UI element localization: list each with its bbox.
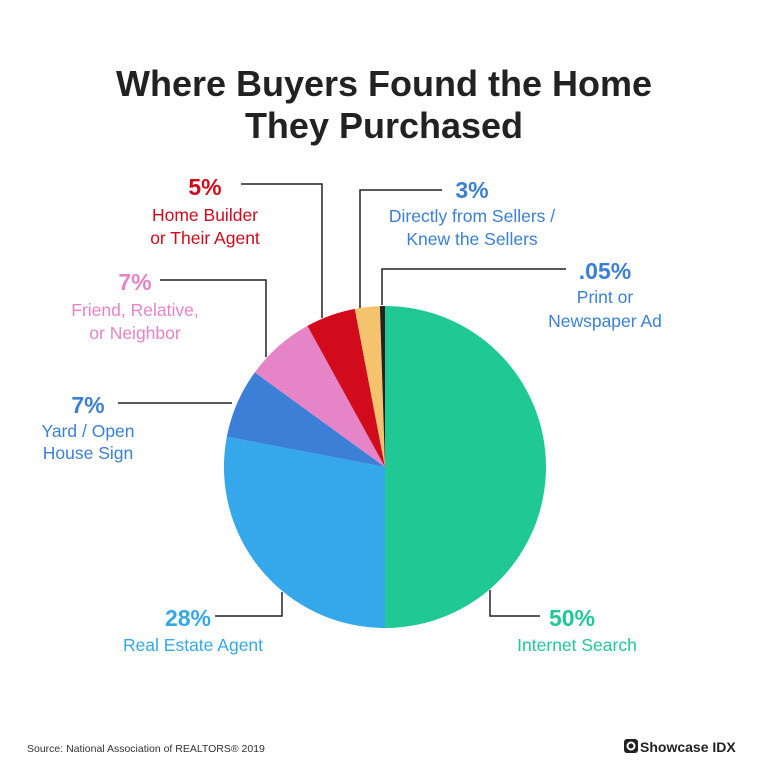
label: sellers xyxy=(389,177,555,249)
label: print: .05% xyxy=(579,258,631,284)
label: sellers: 3% xyxy=(455,177,489,203)
title: They Purchased xyxy=(245,105,523,146)
label: internet search xyxy=(517,605,637,655)
label: real estate agent: Real Estate Agent xyxy=(123,635,263,655)
label: home builder: 5% xyxy=(188,174,222,200)
label: yard sign: Yard / Open xyxy=(41,421,135,441)
label: friend: or Neighbor xyxy=(89,323,181,343)
label: sellers: Knew the Sellers xyxy=(406,229,538,249)
label: internet search: Internet Search xyxy=(517,635,637,655)
label: home builder: or Their Agent xyxy=(150,228,260,248)
pie chart xyxy=(224,306,546,628)
label: friend: 7% xyxy=(118,269,152,295)
label: internet search: 50% xyxy=(549,605,595,631)
title xyxy=(116,63,652,146)
source: Source: National Association of REALTORS® 2019 xyxy=(27,743,265,755)
title: Where Buyers Found the Home xyxy=(116,63,652,104)
label: home builder xyxy=(150,174,260,248)
leader lines xyxy=(118,184,566,616)
label: print: Print or xyxy=(577,287,633,307)
label: print xyxy=(548,258,662,331)
label: friend: Friend, Relative, xyxy=(71,300,199,320)
label: sellers: Directly from Sellers / xyxy=(389,206,555,226)
label: yard sign xyxy=(41,392,135,463)
label: real estate agent: 28% xyxy=(165,605,211,631)
label: real estate agent xyxy=(123,605,263,655)
label: yard sign: House Sign xyxy=(43,443,133,463)
logo: Showcase IDX xyxy=(640,739,736,755)
label: friend xyxy=(71,269,199,343)
label: print: Newspaper Ad xyxy=(548,311,662,331)
label: yard sign: 7% xyxy=(71,392,105,418)
label: home builder: Home Builder xyxy=(152,205,258,225)
